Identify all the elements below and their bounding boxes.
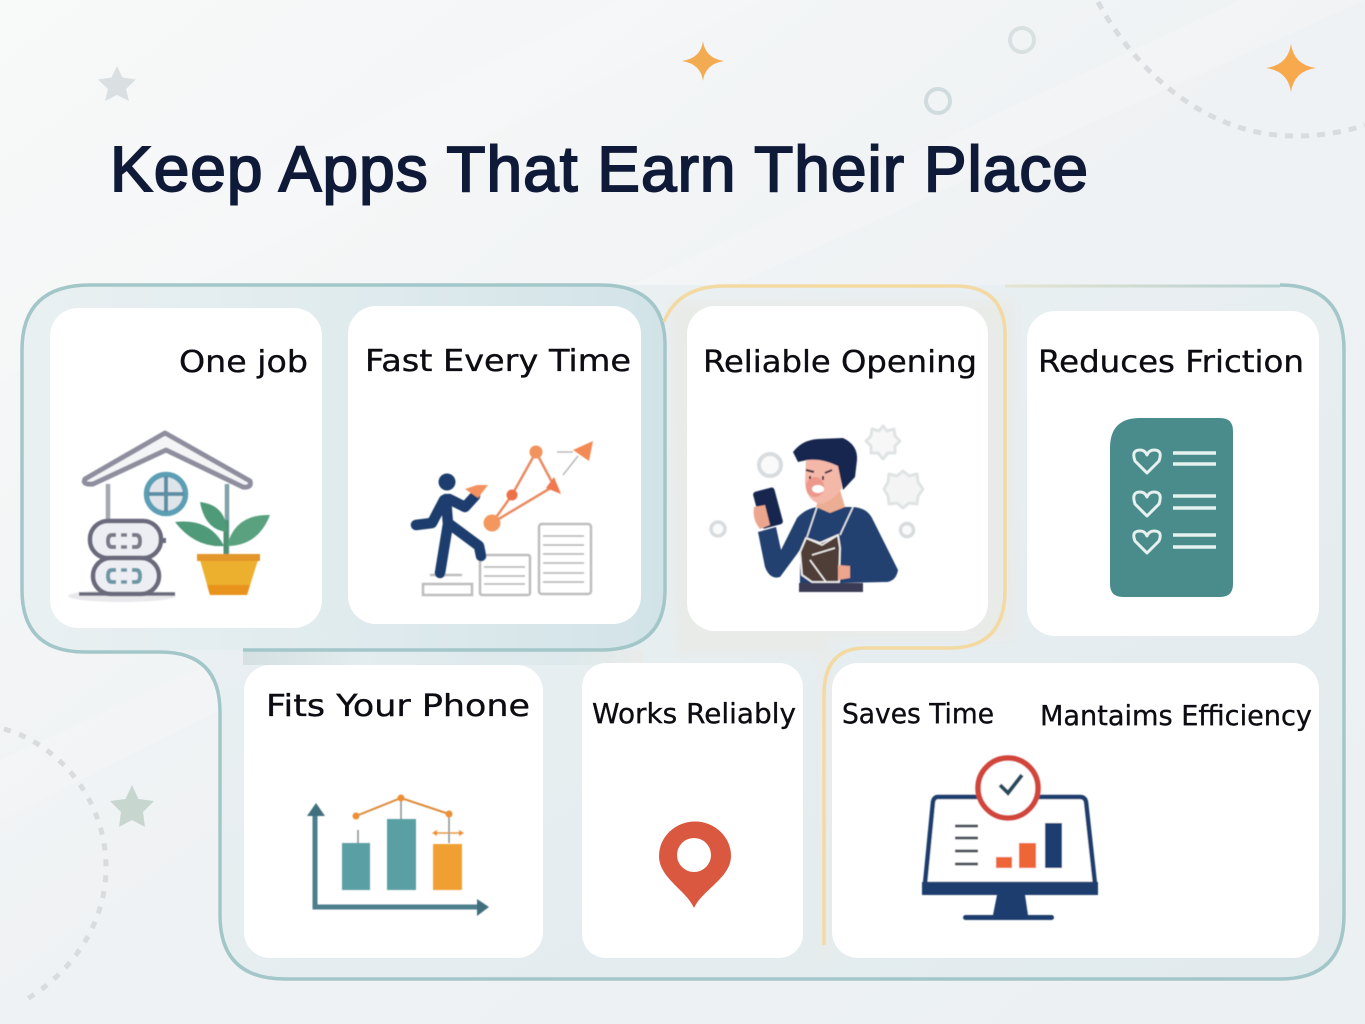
panel: Fits Your Phone — [244, 665, 543, 958]
heading: Works Reliably: Works Reliably — [592, 697, 796, 730]
heading: Saves Time: Saves Time — [842, 697, 994, 730]
icon: bar chart with axes — [307, 794, 489, 916]
ring: top right — [1010, 28, 1034, 52]
panel: Works Reliably — [582, 663, 803, 958]
heading: Reliable Opening: Reliable Opening — [703, 345, 977, 380]
heading: Fits Your Phone: Fits Your Phone — [266, 689, 530, 724]
star: sage bottom left — [110, 785, 154, 827]
decorative dashed arc: left — [4, 729, 106, 1002]
panel: Reliable Opening — [687, 306, 988, 631]
panel: Reduces Friction — [1027, 311, 1319, 636]
ring: top middle — [926, 89, 950, 113]
icon: runner climbing steps — [416, 441, 593, 595]
icon: teal checklist with hearts — [1110, 418, 1233, 597]
panel: Saves Time and Maintains Efficiency — [832, 663, 1319, 958]
heading: One job: One job — [179, 345, 308, 380]
panel: One job — [50, 308, 322, 628]
icon: house with links and plant — [68, 433, 270, 602]
group outline: orange highlight — [664, 286, 1005, 945]
sparkle: orange top right — [1266, 44, 1316, 92]
icon: location pin — [659, 822, 731, 908]
decorative dashed arc: top right — [1098, 2, 1365, 136]
title: Keep Apps That Earn Their Place — [110, 133, 1088, 205]
icon: monitor with clock and bars — [922, 758, 1098, 920]
star: grey top left — [98, 66, 136, 101]
group outline: full teal container — [22, 285, 1344, 979]
heading: Mantaims Efficiency: Mantaims Efficiency — [1040, 699, 1312, 732]
heading: Fast Every Time: Fast Every Time — [365, 344, 631, 379]
icon: person holding phone and package — [711, 426, 923, 592]
sparkle: orange top centre — [682, 41, 724, 81]
heading: Reduces Friction: Reduces Friction — [1038, 345, 1304, 380]
panel: Fast Every Time — [348, 306, 641, 624]
